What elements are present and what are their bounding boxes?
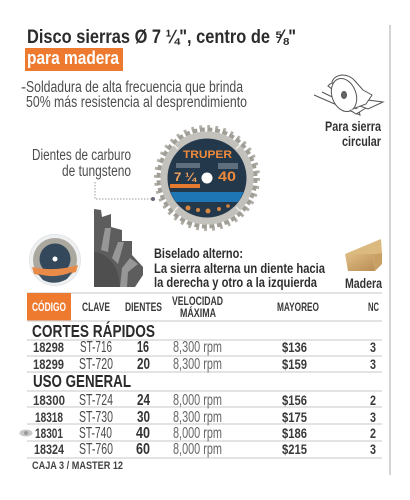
label: madera: Madera bbox=[345, 275, 382, 291]
row 18324 bbox=[34, 441, 376, 458]
row 18299 bbox=[33, 356, 376, 373]
row 18299: ST-720 bbox=[79, 356, 113, 373]
table header: NC bbox=[368, 302, 379, 314]
feature bullet text: - bbox=[21, 79, 26, 96]
icon: circular saw bbox=[314, 75, 383, 115]
saw blade photo: 40 bbox=[218, 168, 236, 184]
row 18318: 18318 bbox=[35, 409, 63, 425]
row 18298: $136 bbox=[282, 339, 307, 355]
row 18318: 30 bbox=[137, 409, 150, 426]
footer note: CAJA 3 / MASTER 12 bbox=[32, 460, 123, 472]
icon label: para sierra circular: circular bbox=[342, 133, 381, 149]
row 18324: 18324 bbox=[34, 441, 64, 457]
subtitle tag: para madera: para madera bbox=[27, 48, 120, 68]
tooth detail diagram bbox=[94, 209, 143, 287]
table header: CLAVE bbox=[82, 302, 110, 314]
icon: eye bbox=[20, 430, 32, 436]
row 18299: 20 bbox=[137, 356, 150, 373]
alternate bevel text: Biselado alterno: bbox=[154, 245, 243, 261]
row 18300: 18300 bbox=[33, 392, 65, 408]
row 18299: $159 bbox=[282, 356, 307, 372]
row 18318: 8,300 rpm bbox=[173, 409, 222, 426]
row 18300: ST-724 bbox=[79, 392, 113, 409]
row 18301: 18301 bbox=[35, 425, 63, 441]
row 18301: 8,000 rpm bbox=[173, 425, 222, 442]
table header: DIENTES bbox=[125, 302, 162, 314]
row 18301 bbox=[35, 425, 376, 442]
row 18318 bbox=[35, 409, 376, 426]
row 18298: ST-716 bbox=[80, 339, 112, 356]
row 18300: 8,000 rpm bbox=[173, 392, 222, 409]
side rule bbox=[389, 25, 391, 475]
alternate bevel text: la derecha y otro a la izquierda bbox=[154, 274, 317, 290]
row 18298: 3 bbox=[370, 339, 376, 355]
feature bullet text: 50% más resistencia al desprendimiento bbox=[26, 94, 247, 111]
row 18298: 8,300 rpm bbox=[173, 339, 222, 356]
alternate bevel text: La sierra alterna un diente hacia bbox=[154, 260, 325, 276]
row 18300 bbox=[33, 392, 376, 409]
callout: dientes de carburo bbox=[32, 147, 155, 201]
row 18298: 16 bbox=[137, 339, 149, 356]
callout: dientes de carburo: de tungsteno bbox=[62, 163, 131, 180]
saw blade photo bbox=[156, 126, 258, 230]
icon: wood bbox=[345, 239, 382, 271]
table header: VELOCIDAD bbox=[172, 296, 223, 308]
feature bullet text: Soldadura de alta frecuencia que brinda bbox=[26, 79, 243, 96]
table header bbox=[27, 293, 379, 321]
row 18299: 8,300 rpm bbox=[173, 356, 222, 373]
saw blade photo: 7 ¼ bbox=[174, 170, 197, 184]
row 18324: ST-760 bbox=[79, 441, 113, 458]
row 18300: 24 bbox=[137, 392, 150, 409]
alternate bevel text bbox=[154, 245, 325, 290]
row 18299: 18299 bbox=[33, 356, 64, 372]
row 18301: $186 bbox=[282, 425, 307, 441]
feature bullet text bbox=[21, 79, 247, 111]
row 18318: 3 bbox=[370, 409, 376, 425]
row 18299: 3 bbox=[370, 356, 376, 372]
row 18324: 3 bbox=[370, 441, 376, 457]
row 18300: $156 bbox=[282, 392, 307, 408]
icon label: para sierra circular bbox=[325, 118, 381, 149]
row 18298: 18298 bbox=[33, 339, 64, 355]
table bbox=[20, 293, 382, 458]
table header: MÁXIMA bbox=[180, 307, 216, 320]
row 18324: $215 bbox=[282, 441, 307, 457]
row 18324: 60 bbox=[136, 441, 150, 458]
row 18298 bbox=[33, 339, 376, 356]
table header: MAYOREO bbox=[277, 302, 319, 314]
row 18301: ST-740 bbox=[79, 425, 112, 442]
row 18324: 8,000 rpm bbox=[173, 441, 222, 458]
table header: CÓDIGO bbox=[32, 301, 66, 314]
callout: dientes de carburo: Dientes de carburo bbox=[32, 147, 131, 164]
row 18301: 2 bbox=[370, 425, 376, 441]
row 18318: $175 bbox=[282, 409, 307, 425]
icon label: para sierra circular: Para sierra bbox=[325, 118, 381, 134]
section heading: uso general: USO GENERAL bbox=[33, 371, 131, 391]
row 18318: ST-730 bbox=[79, 409, 113, 426]
product package photo bbox=[30, 234, 80, 286]
saw blade photo: TRUPER bbox=[183, 149, 232, 161]
row 18301: 40 bbox=[136, 425, 150, 442]
title: Disco sierras Ø 7 ¼", centro de ⅝" bbox=[27, 26, 296, 48]
row 18300: 2 bbox=[370, 392, 376, 408]
section heading: cortes rápidos: CORTES RÁPIDOS bbox=[32, 320, 155, 341]
